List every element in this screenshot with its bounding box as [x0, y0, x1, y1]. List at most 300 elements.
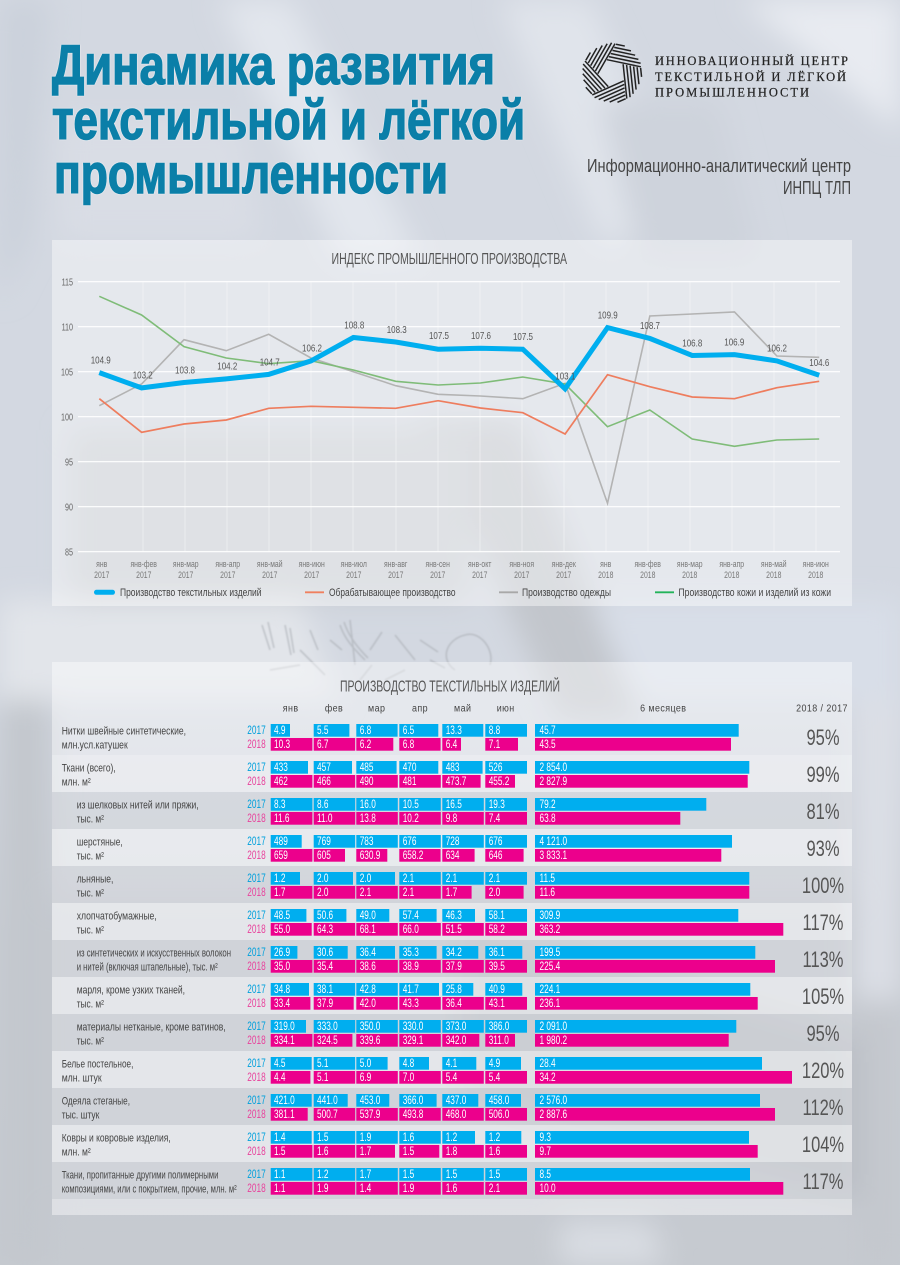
row: synthetic fabrics: 35.0	[274, 961, 290, 973]
line chart: 2017	[178, 570, 194, 580]
row: linen fabrics: 2.1	[489, 873, 501, 885]
data labels: 106.8	[682, 337, 702, 349]
row: silk fabrics: 7.4	[489, 813, 501, 825]
line chart: янв-сен	[426, 559, 450, 569]
row: sewing threads: 6.2	[360, 739, 372, 751]
data labels: 106.2	[767, 343, 787, 354]
row: quilts: 2018	[247, 1109, 266, 1121]
row: synthetic fabrics: из синтетических и искусственных волокон	[77, 947, 231, 959]
row: nonwoven materials: 2 091.0	[540, 1021, 567, 1033]
row: linen fabrics: тыс. м²	[77, 887, 104, 899]
line chart: 2017	[220, 570, 236, 580]
row: cotton fabrics: 58.2	[489, 924, 505, 936]
line chart: 2017	[556, 570, 572, 580]
row: gauze: 33.4	[274, 998, 290, 1010]
row: fabrics total: 473.7	[446, 776, 467, 788]
row: gauze: 25.8	[446, 984, 462, 996]
row: coated fabrics	[62, 1168, 843, 1195]
row: fabrics total: 481	[403, 776, 417, 788]
row: quilts: 453.0	[360, 1095, 381, 1107]
row: nonwoven materials: 319.0	[274, 1021, 295, 1033]
column headers: апр	[412, 703, 428, 715]
row: coated fabrics: 10.0	[540, 1183, 556, 1195]
row: carpets: 1.6	[403, 1132, 415, 1144]
row: coated fabrics: 2.1	[489, 1183, 501, 1195]
line chart: 105	[61, 366, 73, 378]
row: synthetic fabrics: 34.2	[446, 947, 462, 959]
row: bed linen: 4.1	[446, 1058, 458, 1070]
data labels: 108.8	[344, 319, 364, 331]
data labels: 103.8	[175, 364, 195, 376]
row: linen fabrics: 1.7	[446, 887, 458, 899]
row: quilts: 437.0	[446, 1095, 467, 1107]
row: nonwoven materials: 311.0	[489, 1035, 509, 1047]
line chart	[61, 276, 840, 580]
row: wool fabrics: 728	[446, 836, 460, 848]
line chart: 2017	[136, 570, 152, 580]
row: bed linen: 2018	[247, 1072, 266, 1084]
row: wool fabrics: 630.9	[360, 850, 381, 862]
column headers: 2018 / 2017	[796, 703, 848, 715]
data labels: 104.7	[260, 356, 280, 368]
row: gauze: 105%	[802, 985, 844, 1010]
line chart: янв-окт	[468, 559, 492, 569]
row: synthetic fabrics: 35.3	[403, 947, 419, 959]
row: quilts: 506.0	[489, 1109, 510, 1121]
row: quilts: 441.0	[317, 1095, 338, 1107]
row: silk fabrics: 16.5	[446, 799, 462, 811]
legend: Обрабатывающее производство	[329, 587, 456, 599]
row: cotton fabrics: 68.1	[360, 924, 376, 936]
row: linen fabrics: 2.1	[403, 873, 415, 885]
row: sewing threads: 10.3	[274, 739, 290, 751]
row: cotton fabrics: 57.4	[403, 910, 419, 922]
row: cotton fabrics: 2017	[247, 910, 266, 922]
icon: logo	[567, 32, 653, 118]
row: cotton fabrics: хлопчатобумажные,	[77, 910, 157, 922]
data labels: 108.3	[387, 324, 407, 335]
row: cotton fabrics: 309.9	[540, 910, 561, 922]
row: bed linen: 7.0	[403, 1072, 415, 1084]
line: manufacturing	[99, 375, 819, 434]
row: synthetic fabrics: 30.6	[317, 947, 333, 959]
row: nonwoven materials: тыс. м²	[77, 1035, 104, 1047]
row: bed linen: 2017	[247, 1058, 266, 1070]
line chart: 115	[62, 276, 73, 288]
row: gauze: 34.8	[274, 984, 290, 996]
row: silk fabrics: 8.3	[274, 799, 286, 811]
column headers	[283, 703, 848, 715]
row: synthetic fabrics: 35.4	[317, 961, 333, 973]
row: bed linen: 5.1	[317, 1058, 329, 1070]
row: sewing threads: 6.4	[446, 739, 458, 751]
line: textile production	[99, 328, 819, 389]
row: wool fabrics: 769	[317, 836, 331, 848]
line chart: 2017	[388, 570, 404, 580]
column headers: май	[454, 703, 471, 715]
data labels: 109.9	[598, 309, 618, 321]
row: bed linen: 4.8	[403, 1058, 415, 1070]
row: coated fabrics: 1.5	[403, 1169, 415, 1181]
row: bed linen: 5.4	[489, 1072, 501, 1084]
row: bed linen: 28.4	[540, 1058, 556, 1070]
row: cotton fabrics	[77, 909, 843, 936]
row: sewing threads: 43.5	[540, 739, 556, 751]
row: fabrics total: 490	[360, 776, 374, 788]
row: linen fabrics: 2.1	[446, 873, 458, 885]
row: nonwoven materials: 342.0	[446, 1035, 467, 1047]
row: silk fabrics: 79.2	[540, 799, 556, 811]
line chart: янв-мар	[173, 559, 199, 569]
row: cotton fabrics: 50.6	[317, 910, 333, 922]
row: carpets: 1.2	[489, 1132, 501, 1144]
line chart: янв-фев	[634, 559, 661, 569]
row: coated fabrics: 1.4	[360, 1183, 372, 1195]
row: bed linen: 6.9	[360, 1072, 372, 1084]
data labels	[91, 309, 829, 382]
row: quilts: 2 576.0	[540, 1095, 567, 1107]
data labels: 107.5	[513, 331, 533, 342]
row: carpets: 9.3	[540, 1132, 551, 1144]
row: silk fabrics: 2018	[247, 813, 266, 825]
line chart: янв-авг	[384, 559, 407, 569]
row: quilts: 493.8	[403, 1109, 424, 1121]
row: coated fabrics: Ткани, пропитанные другими полимерными	[62, 1169, 218, 1181]
row: cotton fabrics: 51.5	[446, 924, 462, 936]
line chart: янв-мар	[677, 559, 703, 569]
legend: Производство кожи и изделий из кожи	[678, 587, 831, 599]
column headers: 6 месяцев	[640, 703, 686, 715]
line chart: янв	[96, 559, 107, 569]
row: nonwoven materials: 95%	[806, 1022, 840, 1047]
data labels: 103.2	[133, 370, 153, 381]
row: bed linen: 5.0	[360, 1058, 372, 1070]
row: bed linen: Белье постельное,	[62, 1058, 133, 1070]
row: nonwoven materials: 2017	[247, 1021, 266, 1033]
logo text: ПРОМЫШЛЕННОСТИ	[655, 86, 809, 100]
subtitle: information centre: ИНПЦ ТЛП	[783, 177, 851, 198]
row: linen fabrics: 2017	[247, 873, 266, 885]
row: carpets: 2017	[247, 1132, 266, 1144]
row: linen fabrics: 1.7	[274, 887, 286, 899]
row: linen fabrics: льняные,	[77, 873, 113, 885]
row: carpets: 1.2	[446, 1132, 458, 1144]
row: sewing threads: 95%	[806, 726, 840, 751]
title: текстильной и лёгкой	[52, 88, 525, 151]
row: sewing threads: 6.8	[360, 725, 372, 737]
row: carpets: 1.5	[274, 1146, 286, 1158]
row: linen fabrics: 2.1	[403, 887, 415, 899]
row: bed linen: млн. штук	[62, 1072, 102, 1084]
row: linen fabrics: 1.2	[274, 873, 286, 885]
row: sewing threads: 7.1	[489, 739, 501, 751]
line chart: янв-апр	[719, 559, 745, 569]
row: wool fabrics: 676	[403, 836, 417, 848]
row: silk fabrics: 16.0	[360, 799, 376, 811]
row: cotton fabrics: 48.5	[274, 910, 290, 922]
row: silk fabrics	[77, 798, 840, 825]
row: coated fabrics: 2018	[247, 1183, 266, 1195]
row: nonwoven materials: 334.1	[274, 1035, 295, 1047]
line: leather production	[99, 296, 819, 446]
row: silk fabrics: 10.2	[403, 813, 419, 825]
row: cotton fabrics: 117%	[803, 911, 843, 936]
row: nonwoven materials: 333.0	[317, 1021, 338, 1033]
row: synthetic fabrics: 199.5	[540, 947, 561, 959]
row: wool fabrics: 658.2	[403, 850, 424, 862]
row: cotton fabrics: 2018	[247, 924, 266, 936]
row: sewing threads: 6.5	[403, 725, 415, 737]
row: nonwoven materials: 2018	[247, 1035, 266, 1047]
row: wool fabrics: 2018	[247, 850, 266, 862]
row: sewing threads: 4.9	[274, 725, 286, 737]
row: quilts: 468.0	[446, 1109, 467, 1121]
line chart: янв-май	[257, 559, 283, 569]
row: gauze: 41.7	[403, 984, 419, 996]
row: sewing threads: Нитки швейные синтетические,	[62, 725, 186, 737]
row: synthetic fabrics: 36.1	[489, 947, 505, 959]
line chart: янв-ноя	[509, 559, 534, 569]
row: gauze: 42.8	[360, 984, 376, 996]
row: sewing threads: млн.усл.катушек	[62, 739, 128, 751]
row: fabrics total: 2017	[247, 762, 266, 774]
row: carpets: 9.7	[540, 1146, 551, 1158]
row: wool fabrics: тыс. м²	[77, 850, 104, 862]
row: fabrics total: млн. м²	[62, 776, 91, 788]
title: промышленности	[54, 142, 448, 205]
row: quilts	[62, 1094, 843, 1121]
row: sewing threads: 45.7	[540, 725, 556, 737]
row: silk fabrics: 2017	[247, 799, 266, 811]
row: sewing threads: 6.7	[317, 739, 329, 751]
line chart: 2017	[430, 570, 446, 580]
row: fabrics total: Ткани (всего),	[62, 762, 116, 774]
row: coated fabrics: 1.1	[274, 1183, 286, 1195]
row: wool fabrics: 4 121.0	[540, 836, 567, 848]
row: carpets: 1.4	[274, 1132, 286, 1144]
row: sewing threads: 13.3	[446, 725, 462, 737]
line chart: 2018	[808, 570, 824, 580]
line chart: 2018	[724, 570, 740, 580]
data labels: 107.5	[429, 330, 449, 341]
row: silk fabrics: 10.5	[403, 799, 419, 811]
row: sewing threads: 2018	[247, 739, 266, 751]
line chart: 2017	[346, 570, 362, 580]
row: silk fabrics: 81%	[806, 800, 840, 825]
row: fabrics total: 457	[317, 762, 331, 774]
row: wool fabrics: 489	[274, 836, 288, 848]
data labels: 107.6	[471, 330, 491, 341]
row: coated fabrics: 1.2	[317, 1169, 329, 1181]
row: carpets: 2018	[247, 1146, 266, 1158]
line chart: 90	[65, 501, 73, 513]
row: nonwoven materials: 330.0	[403, 1021, 424, 1033]
row: quilts: 2017	[247, 1095, 266, 1107]
row: synthetic fabrics: 225.4	[540, 961, 561, 973]
row: cotton fabrics: 49.0	[360, 910, 376, 922]
row: synthetic fabrics: 39.5	[489, 961, 505, 973]
data labels: 108.7	[640, 320, 660, 331]
row: bed linen: 4.9	[489, 1058, 501, 1070]
row: bed linen: 5.4	[446, 1072, 458, 1084]
row: quilts: 112%	[803, 1096, 843, 1121]
row: sewing threads: 8.8	[489, 725, 501, 737]
row: synthetic fabrics: 36.4	[360, 947, 376, 959]
row: fabrics total: 99%	[806, 763, 840, 788]
title: Динамика развития	[52, 33, 495, 96]
line chart: янв-июн	[803, 559, 829, 569]
row: gauze: 2018	[247, 998, 266, 1010]
row: wool fabrics: 2017	[247, 836, 266, 848]
row: linen fabrics: 2.1	[360, 887, 372, 899]
heading: production table: ПРОИЗВОДСТВО ТЕКСТИЛЬНЫХ ИЗДЕЛИЙ	[340, 676, 560, 695]
row: gauze: 42.0	[360, 998, 376, 1010]
line chart: янв-июл	[341, 559, 367, 569]
row: coated fabrics: 1.7	[360, 1169, 372, 1181]
line chart: янв-апр	[215, 559, 241, 569]
row: fabrics total: 2 854.0	[540, 762, 567, 774]
row: fabrics total: 483	[446, 762, 460, 774]
row: cotton fabrics: 55.0	[274, 924, 290, 936]
row: bed linen: 34.2	[540, 1072, 556, 1084]
row: cotton fabrics: 46.3	[446, 910, 462, 922]
row: linen fabrics: 100%	[802, 874, 844, 899]
row: nonwoven materials: 329.1	[403, 1035, 424, 1047]
heading: index chart: ИНДЕКС ПРОМЫШЛЕННОГО ПРОИЗВОДСТВА	[332, 251, 567, 268]
column headers: мар	[368, 703, 385, 715]
row: coated fabrics: 2017	[247, 1169, 266, 1181]
data labels: 104.9	[91, 354, 111, 366]
row: quilts: 421.0	[274, 1095, 295, 1107]
row: synthetic fabrics: 38.6	[360, 961, 376, 973]
row: wool fabrics: 676	[489, 836, 503, 848]
row: sewing threads: 5.5	[317, 725, 329, 737]
column headers: янв	[283, 703, 299, 715]
row: quilts: 2 887.6	[540, 1109, 567, 1121]
row: gauze	[77, 983, 844, 1010]
row: bed linen: 4.4	[274, 1072, 286, 1084]
line chart: янв	[600, 559, 611, 569]
data labels: 106.9	[724, 336, 744, 348]
row: nonwoven materials: 1 980.2	[540, 1035, 567, 1047]
line chart: 2017	[472, 570, 488, 580]
row: synthetic fabrics: 2018	[247, 961, 266, 973]
row: carpets: 1.8	[446, 1146, 458, 1158]
row: gauze: 40.9	[489, 984, 505, 996]
line chart: 110	[62, 321, 73, 333]
row: linen fabrics: 2.0	[489, 887, 501, 899]
row: synthetic fabrics: 26.9	[274, 947, 290, 959]
row: gauze: 37.9	[317, 998, 333, 1010]
row: linen fabrics: 2018	[247, 887, 266, 899]
row: wool fabrics: 605	[317, 850, 331, 862]
row: coated fabrics: 1.5	[446, 1169, 458, 1181]
row: carpets: млн. м²	[62, 1146, 91, 1158]
line chart: 2017	[262, 570, 278, 580]
row: nonwoven materials: 324.5	[317, 1035, 338, 1047]
row: synthetic fabrics: 38.9	[403, 961, 419, 973]
row: cotton fabrics: 363.2	[540, 924, 561, 936]
row: coated fabrics: 1.9	[317, 1183, 329, 1195]
panel: industrial production index	[52, 240, 852, 606]
row: nonwoven materials: материалы нетканые, кроме ватинов,	[77, 1021, 226, 1033]
row: nonwoven materials	[77, 1020, 840, 1047]
logo text: ИННОВАЦИОННЫЙ ЦЕНТР	[655, 54, 848, 68]
row: gauze: 236.1	[540, 998, 561, 1010]
row: quilts: 458.0	[489, 1095, 510, 1107]
row: coated fabrics: 1.6	[446, 1183, 458, 1195]
row: quilts: 381.1	[274, 1109, 295, 1121]
data labels: 103.1	[555, 370, 575, 382]
subtitle: information centre	[587, 155, 851, 198]
row: fabrics total: 433	[274, 762, 288, 774]
legend: Производство одежды	[522, 587, 611, 599]
row: carpets: 1.6	[317, 1146, 329, 1158]
row: wool fabrics: 3 833.1	[540, 850, 567, 862]
legend: Производство текстильных изделий	[120, 587, 262, 599]
row: cotton fabrics: тыс. м²	[77, 924, 104, 936]
logo text: ТЕКСТИЛЬНОЙ И ЛЁГКОЙ	[655, 70, 846, 84]
row: wool fabrics	[77, 835, 840, 862]
row: wool fabrics: 93%	[806, 837, 840, 862]
row: gauze: 224.1	[540, 984, 561, 996]
row: bed linen: 4.5	[274, 1058, 286, 1070]
row: coated fabrics: 1.1	[274, 1169, 286, 1181]
row: fabrics total: 462	[274, 776, 288, 788]
row: gauze: марля, кроме узких тканей,	[77, 984, 185, 996]
row: coated fabrics: 117%	[803, 1170, 843, 1195]
row: quilts: 366.0	[403, 1095, 424, 1107]
row: carpets: 1.7	[360, 1146, 372, 1158]
row: synthetic fabrics	[77, 946, 843, 973]
line chart: янв-июн	[299, 559, 325, 569]
line chart: 2017	[514, 570, 530, 580]
row: carpets: 1.5	[403, 1146, 415, 1158]
row: silk fabrics: тыс. м²	[77, 813, 104, 825]
row: quilts: тыс. штук	[62, 1109, 100, 1121]
row: silk fabrics: из шелковых нитей или пряжи,	[77, 799, 199, 811]
line: apparel production	[99, 312, 819, 503]
row: silk fabrics: 8.6	[317, 799, 329, 811]
row: cotton fabrics: 66.0	[403, 924, 419, 936]
row: carpets: Ковры и ковровые изделия,	[62, 1132, 171, 1144]
row: gauze: 36.4	[446, 998, 462, 1010]
row: silk fabrics: 19.3	[489, 799, 505, 811]
line chart: 2018	[640, 570, 656, 580]
row: sewing threads	[62, 724, 840, 751]
row: linen fabrics: 2.0	[317, 873, 329, 885]
column headers: июн	[497, 703, 515, 715]
row: fabrics total	[62, 761, 840, 788]
row: nonwoven materials: 386.0	[489, 1021, 510, 1033]
row: carpets	[62, 1131, 844, 1158]
row: carpets: 104%	[802, 1133, 844, 1158]
line chart: 2018	[598, 570, 614, 580]
row: linen fabrics: 11.5	[540, 873, 555, 885]
row: gauze: 38.1	[317, 984, 333, 996]
row: bed linen: 5.1	[317, 1072, 329, 1084]
row: fabrics total: 466	[317, 776, 331, 788]
row: fabrics total: 455.2	[489, 776, 510, 788]
row: wool fabrics: 634	[446, 850, 460, 862]
row: carpets: 1.9	[360, 1132, 372, 1144]
row: linen fabrics: 2.0	[360, 873, 372, 885]
row: gauze: тыс. м²	[77, 998, 104, 1010]
line chart: 100	[61, 411, 73, 423]
row: synthetic fabrics: и нитей (включая штапельные), тыс. м²	[77, 961, 218, 973]
row: synthetic fabrics: 37.9	[446, 961, 462, 973]
row: wool fabrics: 646	[489, 850, 503, 862]
